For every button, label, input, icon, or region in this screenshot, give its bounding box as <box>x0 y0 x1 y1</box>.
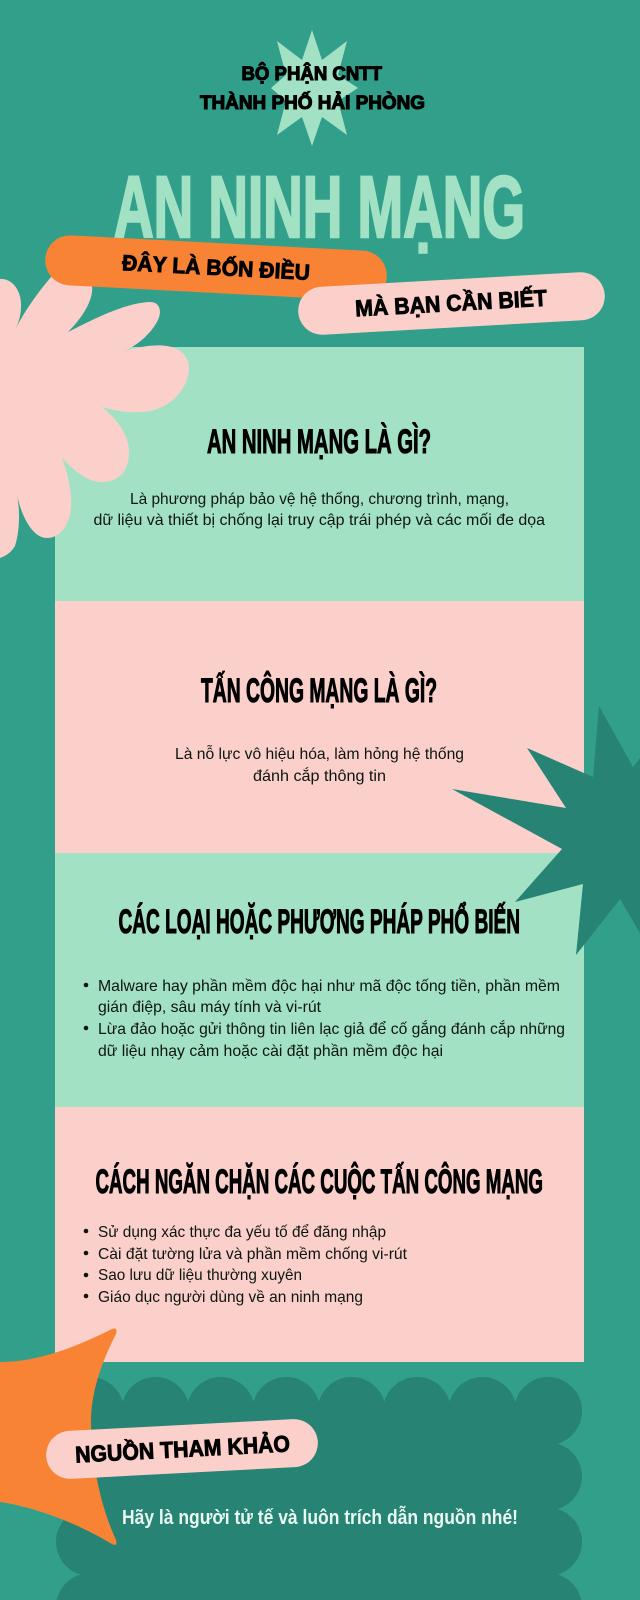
text block: attack definition <box>175 744 464 785</box>
text block: attack definition: đánh cắp thông tin <box>253 766 386 785</box>
scalloped footer panel <box>56 1377 582 1600</box>
footer note: Hãy là người tử tế và luôn trích dẫn nguồn nhé! <box>122 1505 518 1529</box>
panel: tấn công mạng là gì <box>55 601 584 853</box>
pill label: ĐÂY LÀ BỐN ĐIỀU <box>122 249 311 285</box>
panel: an ninh mạng là gì <box>55 347 584 601</box>
header: department: THÀNH PHỐ HẢI PHÒNG <box>200 92 425 114</box>
header: department <box>200 63 425 114</box>
bullet list: prevention: Sao lưu dữ liệu thường xuyên <box>98 1267 302 1284</box>
bullet list: prevention: Giáo dục người dùng về an ninh mạng <box>98 1289 363 1306</box>
bullet list: common types: Malware hay phần mềm độc hại như mã độc tống tiền, phần mềm <box>98 978 560 995</box>
bullet list: prevention: Cài đặt tường lửa và phần mềm chống vi-rút <box>98 1246 408 1263</box>
text block: definition: dữ liệu và thiết bị chống lại truy cập trái phép và các mối đe dọa <box>94 512 545 529</box>
text block: attack definition: Là nỗ lực vô hiệu hóa, làm hỏng hệ thống <box>175 744 464 763</box>
icon: orange star <box>0 1329 116 1545</box>
panel: các loại hoặc phương pháp phổ biến <box>55 853 584 1107</box>
pill: nguồn tham khảo <box>45 1418 319 1480</box>
bullet list: common types: dữ liệu nhạy cảm hoặc cài đặt phần mềm độc hại <box>98 1043 443 1060</box>
icon: mint star behind header <box>271 30 358 146</box>
panel: cách ngăn chặn <box>55 1107 584 1362</box>
heading: tấn công mạng là gì: TẤN CÔNG MẠNG LÀ GÌ? <box>201 671 437 710</box>
pill: đây là bốn điều <box>44 234 388 302</box>
icon: pink flower <box>0 276 189 558</box>
text block: definition: Là phương pháp bảo vệ hệ thống, chương trình, mạng, <box>130 491 509 508</box>
bullet list: common types: Lừa đảo hoặc gửi thông tin liên lạc giả để cố gắng đánh cắp những <box>98 1019 565 1038</box>
bullet list: prevention: Sử dụng xác thực đa yếu tố để đăng nhập <box>98 1223 386 1241</box>
icon: dark teal star <box>452 706 640 955</box>
bullet list: common types <box>84 978 565 1060</box>
bullet list: prevention <box>84 1223 408 1306</box>
header: department: BỘ PHẬN CNTT <box>242 63 382 85</box>
pill label: NGUỒN THAM KHẢO <box>74 1428 291 1468</box>
heading: an ninh mạng là gì: AN NINH MẠNG LÀ GÌ? <box>207 423 431 461</box>
pill: mà bạn cần biết <box>297 271 606 336</box>
text block: definition <box>94 491 545 529</box>
pill label: MÀ BẠN CẦN BIẾT <box>354 284 548 321</box>
bullet list: common types: gián điệp, sâu máy tính và vi-rút <box>98 999 322 1016</box>
